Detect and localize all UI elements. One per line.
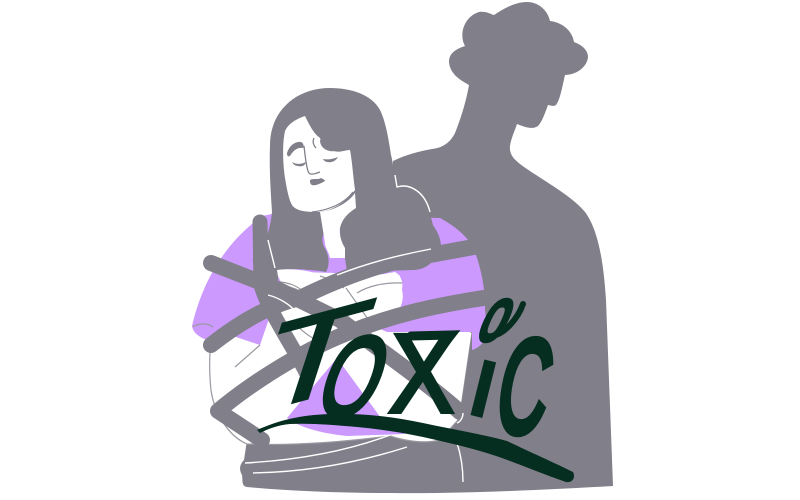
- white highlight lines: [245, 175, 463, 482]
- left eyebrow: [287, 142, 304, 156]
- letter O: O: [303, 314, 406, 440]
- jawline: [312, 192, 353, 212]
- ropes: [211, 222, 490, 440]
- neck: [320, 193, 356, 258]
- shadow silhouette: [240, 2, 613, 493]
- letter T: T: [241, 269, 389, 442]
- letter X: X: [387, 311, 459, 436]
- lettering: TOXIC: [241, 269, 563, 461]
- X top brush: [411, 335, 451, 362]
- nose and cheek lines: [304, 138, 320, 174]
- face: [283, 116, 355, 212]
- letter I: I: [463, 345, 504, 433]
- facial features: [287, 142, 338, 185]
- i-dot loop: o: [466, 274, 530, 357]
- body: white torso and arms: [210, 270, 472, 444]
- underline brush stroke: [257, 414, 574, 482]
- letter C: C: [487, 313, 563, 461]
- mouth: [310, 178, 325, 185]
- i-dot tail brush: [492, 304, 523, 336]
- hair fringe lock: [320, 138, 340, 151]
- eyes: [292, 157, 338, 166]
- body: purple sweater shoulders: [192, 214, 488, 350]
- body: purple centre panel: [287, 358, 405, 436]
- hair: [253, 88, 441, 290]
- gray cover over body right edge: [440, 333, 490, 445]
- hands and crossed arms: [193, 269, 403, 367]
